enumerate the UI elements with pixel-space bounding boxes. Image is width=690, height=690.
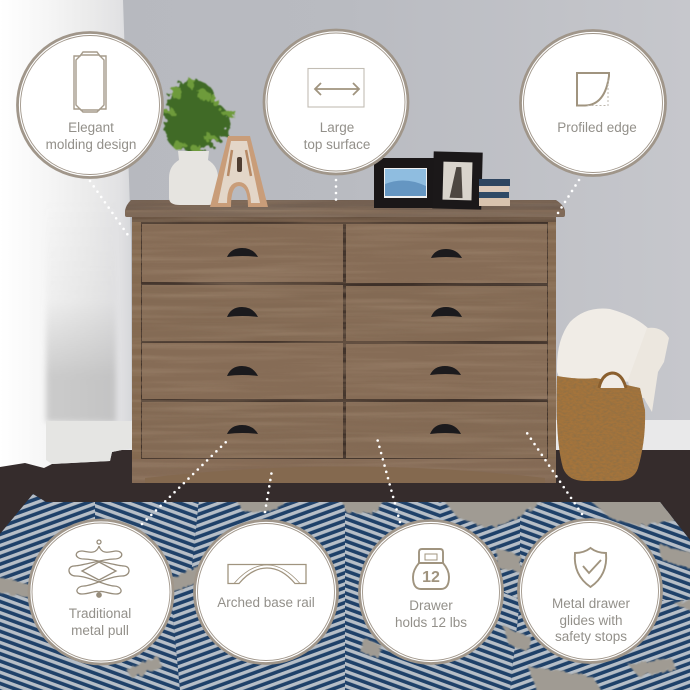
dresser top xyxy=(125,200,565,212)
arched base rail xyxy=(132,459,556,483)
label: safety stops xyxy=(555,629,627,644)
plant xyxy=(164,79,236,151)
icon: molding xyxy=(74,52,106,112)
decorative letter A xyxy=(210,136,268,207)
label: metal pull xyxy=(71,623,129,638)
landscape photo frame xyxy=(374,158,436,208)
wood grain texture xyxy=(125,200,565,483)
drawer gaps xyxy=(141,222,548,459)
drawer front right 4 xyxy=(346,402,547,458)
drawer front right 1 xyxy=(346,224,547,283)
white throw blanket xyxy=(557,309,669,412)
panel: large top surface xyxy=(264,30,408,174)
label: Metal drawer xyxy=(552,596,631,611)
pull left 2 xyxy=(227,307,258,317)
portrait photo frame xyxy=(432,151,483,210)
dresser body xyxy=(132,212,556,483)
drawer front left 1 xyxy=(142,224,343,282)
panel: profiled edge xyxy=(520,30,666,176)
dresser front edge xyxy=(125,210,565,217)
icon: profiled corner xyxy=(577,73,609,106)
label: Large xyxy=(320,120,354,135)
pull right 1 xyxy=(431,249,462,258)
stack of books xyxy=(479,179,510,206)
pull right 4 xyxy=(430,424,461,434)
icon: shield with check xyxy=(575,548,606,587)
label: Profiled edge xyxy=(557,120,637,135)
pull left 3 xyxy=(227,366,258,376)
panel: arched base rail xyxy=(194,520,338,664)
panel: traditional metal pull xyxy=(29,520,173,664)
light wood streaks xyxy=(125,200,565,483)
icon: top surface with arrow xyxy=(308,68,364,107)
drawer pulls xyxy=(227,248,462,434)
curtain xyxy=(0,0,132,468)
white vase xyxy=(169,151,218,205)
label: holds 12 lbs xyxy=(395,615,467,630)
drawer front left 3 xyxy=(142,343,343,399)
woven basket xyxy=(555,373,647,482)
label: top surface xyxy=(304,137,370,152)
drawer front left 2 xyxy=(142,285,343,341)
baseboard xyxy=(110,420,690,450)
panel: metal drawer glides xyxy=(518,520,662,662)
floor xyxy=(0,450,690,690)
icon: kettlebell weight: 12 xyxy=(422,569,440,586)
drawer front left 4 xyxy=(142,402,343,458)
label: molding design xyxy=(46,137,136,152)
icon: kettlebell weight xyxy=(413,549,449,589)
patterned rug xyxy=(0,490,690,690)
label: Elegant xyxy=(68,120,114,135)
drawer front right 3 xyxy=(346,344,547,399)
icon: arch xyxy=(228,564,306,584)
dotted leader lines xyxy=(90,180,582,524)
pull right 3 xyxy=(430,366,461,375)
wall background xyxy=(0,0,690,452)
drawer front right 2 xyxy=(346,286,547,341)
pull left 1 xyxy=(227,248,258,257)
panel: elegant molding design xyxy=(18,32,162,178)
label: Arched base rail xyxy=(217,595,315,610)
underside shadow xyxy=(132,217,556,222)
pull right 2 xyxy=(431,307,462,317)
dresser xyxy=(125,200,565,483)
icon: flourish xyxy=(69,540,129,597)
pull left 4 xyxy=(227,425,258,434)
label: Drawer xyxy=(409,598,453,613)
panel: drawer holds 12 lbs xyxy=(360,520,502,664)
label: Traditional xyxy=(69,606,131,621)
label: glides with xyxy=(559,613,623,628)
